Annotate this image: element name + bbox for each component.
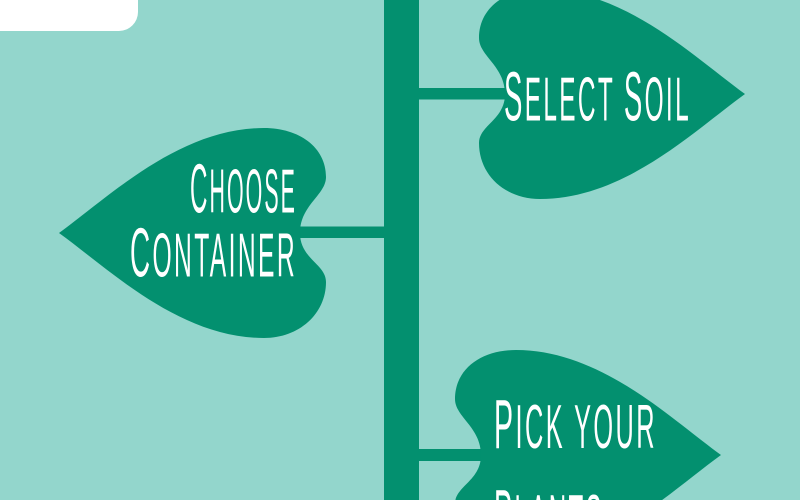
branch: select soil [419, 88, 509, 100]
white rounded tab, top left [0, 0, 138, 31]
branch: pick your plants [419, 449, 485, 461]
infographic canvas: CHOOSE [190, 150, 297, 228]
leaf: select soil [479, 0, 745, 199]
infographic canvas: CONTAINER [130, 214, 297, 292]
branch: choose container [296, 226, 384, 238]
leaf: pick your plants [455, 350, 721, 500]
label: select soil: SELECT SOIL [504, 58, 691, 136]
plant stem [384, 0, 419, 500]
leaf: choose container [59, 128, 326, 338]
